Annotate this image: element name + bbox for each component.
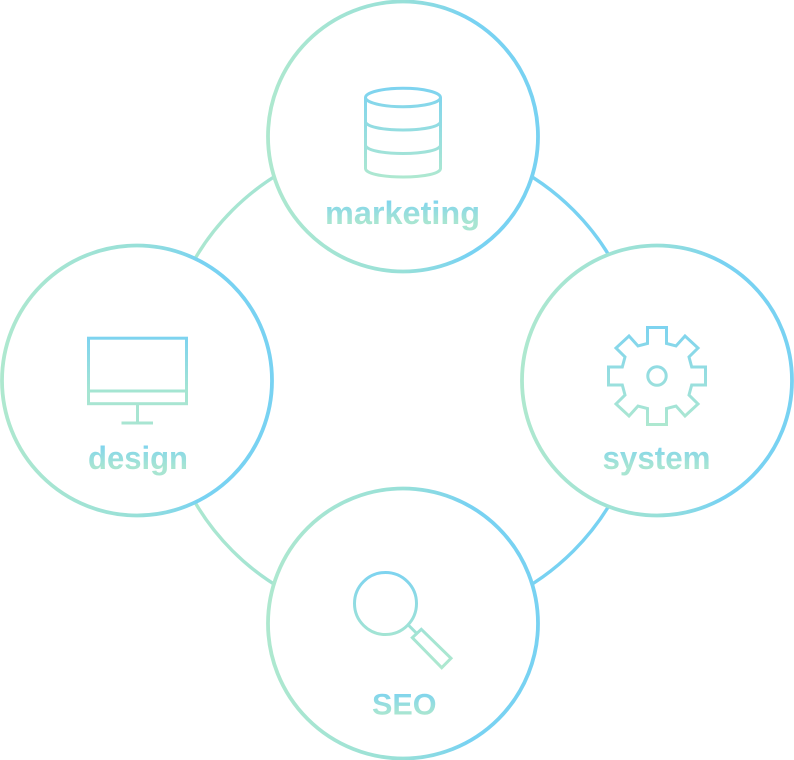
design circle xyxy=(2,246,272,516)
icon: database cylinder xyxy=(366,88,440,177)
label: system: system xyxy=(602,440,710,476)
connecting ring xyxy=(162,140,644,622)
icon: monitor xyxy=(88,338,186,423)
label: design: design xyxy=(88,440,188,476)
icon: gear xyxy=(608,328,706,424)
panel: design xyxy=(2,246,272,516)
panel: SEO xyxy=(268,488,538,758)
label: marketing: marketing xyxy=(325,195,480,231)
panel: system xyxy=(522,246,792,516)
label: SEO: SEO xyxy=(372,688,436,722)
SEO circle xyxy=(268,488,538,758)
system circle xyxy=(522,246,792,516)
panel: marketing xyxy=(268,2,538,272)
marketing circle xyxy=(268,2,538,272)
icon: magnifying glass xyxy=(354,572,451,668)
